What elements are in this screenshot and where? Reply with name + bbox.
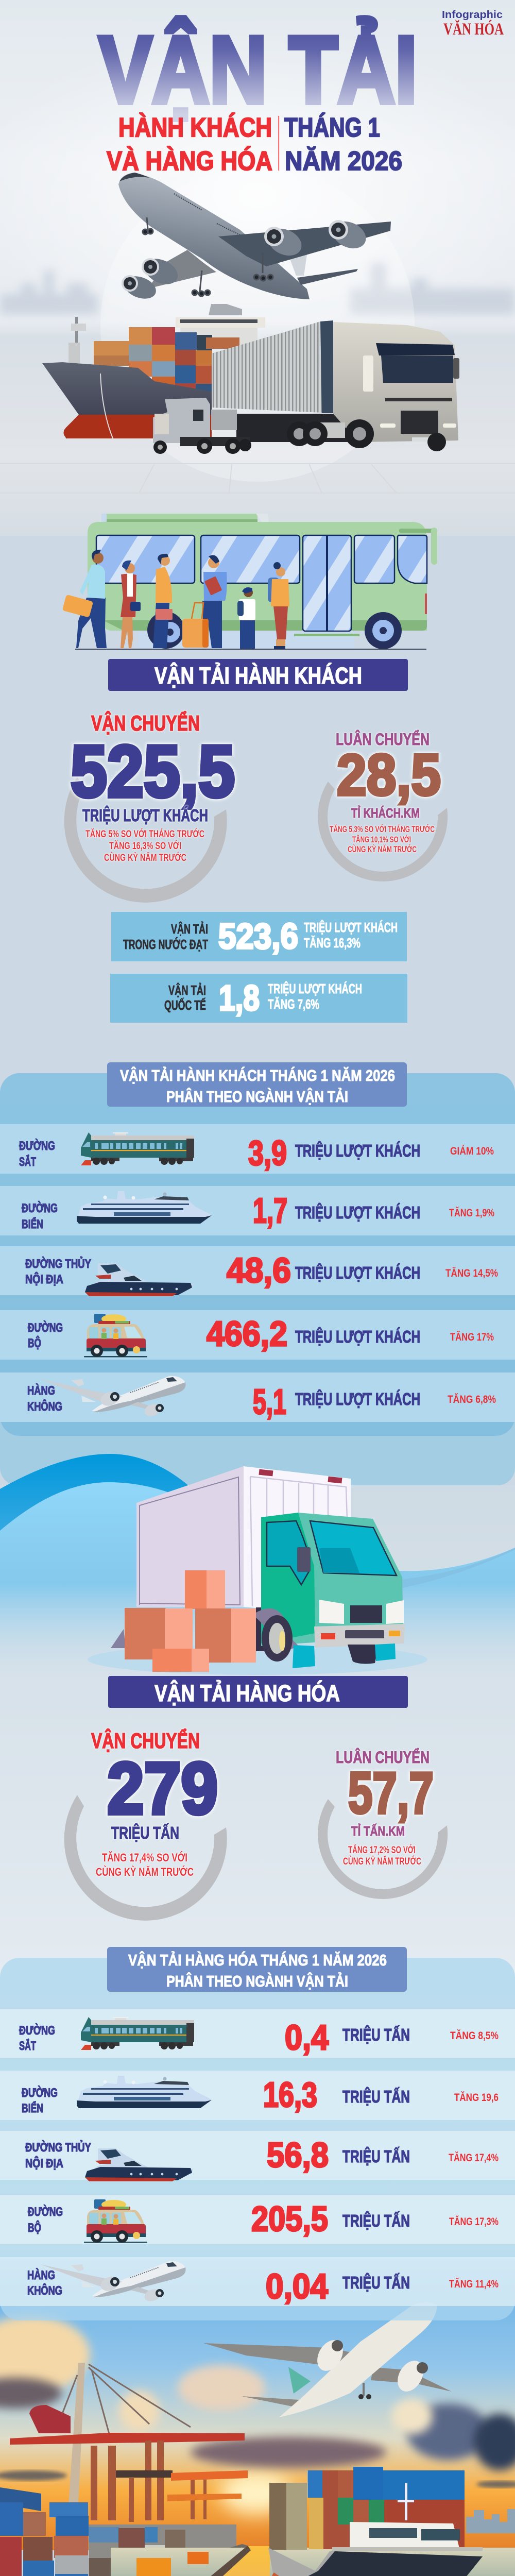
row: aviation: TRIỆU LƯỢT KHÁCH [295, 1389, 420, 1409]
illustration: airplane [118, 173, 391, 303]
row: aviation: 5,1 [253, 1382, 286, 1421]
stat: passengers carried: TRIỆU LƯỢT KHÁCH [82, 806, 208, 825]
row: inland waterway: NỘI ĐỊA [25, 1272, 63, 1286]
row: road: ĐƯỜNG [28, 2205, 63, 2219]
sky [0, 2257, 515, 2550]
row: road: TĂNG 17% [450, 1331, 494, 1343]
stat: tonne-km: CÙNG KỲ NĂM TRƯỚC [343, 1856, 421, 1867]
stat: freight carried: 279 [107, 1748, 218, 1829]
stat: tonne-km: TỈ TẤN.KM [351, 1823, 405, 1839]
subtitle: THÁNG 1 [284, 113, 380, 143]
logo: Infographic Văn Hóa: Infographic [442, 9, 503, 21]
stat: freight carried: TĂNG 17,4% SO VỚI [102, 1851, 187, 1864]
row: sea: TĂNG 1,9% [449, 1207, 494, 1219]
stat: passenger-km: 28,5 [337, 742, 441, 807]
row: aviation: KHÔNG [27, 1399, 62, 1414]
stat: passengers carried: TĂNG 5% SO VỚI THÁNG TRƯỚC [85, 828, 204, 840]
row: inland waterway: 48,6 [227, 1251, 291, 1290]
subtitle: NĂM 2026 [285, 146, 402, 176]
panel heading: PHÂN THEO NGÀNH VẬN TẢI [166, 1087, 348, 1106]
row: road: 205,5 [251, 2199, 328, 2239]
stat: freight carried: TRIỆU TẤN [111, 1823, 179, 1842]
stat: passengers carried: TĂNG 16,3% SO VỚI [109, 840, 181, 852]
row: aviation: TĂNG 6,8% [448, 1394, 496, 1405]
row: inland waterway: TRIỆU LƯỢT KHÁCH [295, 1263, 420, 1282]
row: aviation: 0,04 [266, 2267, 328, 2306]
box: domestic transport: TĂNG 16,3% [304, 935, 360, 951]
port vehicles [0, 2552, 209, 2576]
panel heading: PHÂN THEO NGÀNH VẬN TẢI [166, 1972, 348, 1990]
panel heading: VẬN TẢI HÀNH KHÁCH THÁNG 1 NĂM 2026 [120, 1066, 395, 1084]
clouds [0, 2316, 515, 2488]
row: aviation [0, 1372, 515, 1422]
row: aviation: TRIỆU TẤN [342, 2273, 410, 2292]
quay road [0, 2544, 248, 2576]
container stacks [0, 2487, 236, 2576]
background: lighter backing panel [0, 1288, 515, 1485]
row: road: ĐƯỜNG [28, 1320, 63, 1335]
row: aviation: TĂNG 11,4% [449, 2278, 499, 2290]
port cranes [10, 2363, 248, 2522]
logo: Infographic Văn Hóa [442, 9, 504, 39]
row: railway: SẮT [19, 1155, 36, 1169]
stat: freight carried: VẬN CHUYỂN [91, 1728, 200, 1753]
row: railway: SẮT [19, 2039, 36, 2053]
hero illustration background [0, 0, 515, 536]
stat: passenger-km: TĂNG 10,1% SO VỚI [352, 835, 411, 844]
bottom photo: port at sunset [0, 2257, 515, 2576]
row: railway: ĐƯỜNG [19, 2023, 55, 2038]
container ship [268, 2467, 483, 2576]
row: railway: 0,4 [285, 2018, 329, 2057]
illustration: small truck [153, 398, 251, 454]
decorative waves [0, 1454, 515, 1685]
stat: passengers carried [71, 710, 235, 863]
box: domestic transport: VẬN TẢI [171, 921, 208, 937]
row: road: BỘ [28, 1336, 41, 1350]
row: road [0, 1310, 515, 1360]
row: road: 466,2 [207, 1314, 287, 1353]
row: sea: TRIỆU TẤN [342, 2087, 410, 2106]
panel: passengers by mode [0, 1062, 515, 1436]
row: sea: TRIỆU LƯỢT KHÁCH [295, 1203, 420, 1222]
row: inland waterway [0, 1246, 515, 1296]
row: inland waterway: NỘI ĐỊA [25, 2156, 63, 2171]
illustration: cargo ship [42, 304, 265, 439]
background: freight section [0, 1485, 515, 2001]
row: railway: 3,9 [248, 1133, 287, 1173]
row: aviation: HÀNG [27, 1383, 55, 1398]
row: sea: BIỂN [22, 1217, 43, 1231]
panel heading [107, 1947, 407, 1992]
subtitle: HÀNH KHÁCH [118, 113, 272, 143]
row: road: BỘ [28, 2221, 41, 2235]
box: international transport: TRIỆU LƯỢT KHÁCH [268, 981, 362, 996]
box: international transport [110, 974, 407, 1023]
stat: freight carried: CÙNG KỲ NĂM TRƯỚC [96, 1866, 194, 1878]
ring: tonne-km [318, 1799, 448, 1899]
section banner: passengers [108, 659, 408, 691]
row: aviation [0, 2257, 515, 2306]
row: sea: BIỂN [22, 2101, 43, 2115]
airplane [203, 2302, 452, 2417]
stat: tonne-km: LUÂN CHUYỂN [336, 1748, 430, 1767]
row: inland waterway: 56,8 [267, 2136, 329, 2175]
row: inland waterway: TĂNG 17,4% [449, 2152, 499, 2164]
sun [220, 2471, 292, 2514]
row: railway [0, 2009, 515, 2058]
box: domestic transport: 523,6 [218, 916, 298, 956]
row: railway: TĂNG 8,5% [450, 2030, 499, 2042]
stat: freight carried [91, 1728, 218, 1878]
row: sea: ĐƯỜNG [22, 1201, 58, 1215]
row: inland waterway: ĐƯỜNG THỦY [25, 2140, 91, 2155]
section banner: freight [108, 1676, 408, 1708]
row: inland waterway [0, 2131, 515, 2181]
row: road [0, 2195, 515, 2244]
row: railway: ĐƯỜNG [19, 1139, 55, 1153]
section banner: passengers: VẬN TẢI HÀNH KHÁCH [154, 663, 362, 689]
row: railway: TRIỆU TẤN [342, 2025, 410, 2044]
ring: passengers carried [64, 777, 227, 903]
water [111, 2548, 515, 2576]
stat: tonne-km [336, 1748, 434, 1867]
stat: passenger-km: TĂNG 5,3% SO VỚI THÁNG TRƯỚC [330, 824, 435, 834]
box: international transport: VẬN TẢI [168, 982, 206, 998]
row: railway [0, 1124, 515, 1174]
ring: passenger-km [318, 782, 448, 882]
subtitle [107, 113, 402, 176]
row: inland waterway: ĐƯỜNG THỦY [25, 1256, 91, 1271]
row: sea [0, 1186, 515, 1235]
stat: tonne-km: TĂNG 17,2% SO VỚI [348, 1844, 416, 1856]
stat: passengers carried: 525,5 [71, 731, 235, 812]
row: inland waterway: TRIỆU TẤN [342, 2147, 410, 2166]
row: sea [0, 2071, 515, 2120]
stat: passengers carried: VẬN CHUYỂN [91, 710, 200, 735]
box: domestic transport [111, 912, 407, 961]
stat: passenger-km: LUÂN CHUYỂN [336, 730, 430, 749]
row: sea: 1,7 [253, 1191, 287, 1230]
box: domestic transport: TRIỆU LƯỢT KHÁCH [304, 920, 398, 935]
ring: freight carried [64, 1795, 227, 1921]
row: sea: TĂNG 19,6 [454, 2092, 499, 2104]
illustration: bus [75, 514, 435, 650]
illustration: container truck [212, 320, 459, 451]
panel heading: VẬN TẢI HÀNG HÓA THÁNG 1 NĂM 2026 [128, 1951, 387, 1969]
subtitle: VÀ HÀNG HÓA [107, 146, 272, 176]
illustration: delivery truck [88, 1466, 427, 1675]
stat: passenger-km: TỈ KHÁCH.KM [351, 805, 420, 821]
stat: passengers carried: CÙNG KỲ NĂM TRƯỚC [104, 852, 186, 863]
stat: tonne-km: 57,7 [348, 1760, 434, 1825]
row: sea: ĐƯỜNG [22, 2086, 58, 2100]
box: international transport: QUỐC TẾ [164, 997, 206, 1013]
box: international transport: 1,8 [219, 978, 260, 1018]
illustration: passengers [62, 550, 289, 649]
row: road: TRIỆU LƯỢT KHÁCH [295, 1327, 420, 1346]
row: road: TĂNG 17,3% [449, 2216, 499, 2228]
row: road: TRIỆU TẤN [342, 2211, 410, 2230]
stat: passenger-km: CÙNG KỲ NĂM TRƯỚC [348, 844, 417, 854]
panel: freight by mode [0, 1947, 515, 2320]
row: railway: TRIỆU LƯỢT KHÁCH [295, 1141, 420, 1160]
row: inland waterway: TĂNG 14,5% [445, 1267, 498, 1279]
row: aviation: HÀNG [27, 2268, 55, 2282]
stat: passenger-km [330, 730, 441, 854]
section banner: freight: VẬN TẢI HÀNG HÓA [154, 1680, 340, 1706]
box: international transport: TĂNG 7,6% [268, 996, 319, 1012]
row: railway: GIẢM 10% [450, 1145, 494, 1157]
panel heading [107, 1062, 407, 1107]
row: sea: 16,3 [263, 2075, 317, 2114]
main title: VẬN TẢI [99, 16, 417, 123]
distant city [466, 2509, 515, 2533]
row: aviation: KHÔNG [27, 2283, 62, 2298]
box: domestic transport: TRONG NƯỚC ĐẠT [123, 937, 208, 952]
